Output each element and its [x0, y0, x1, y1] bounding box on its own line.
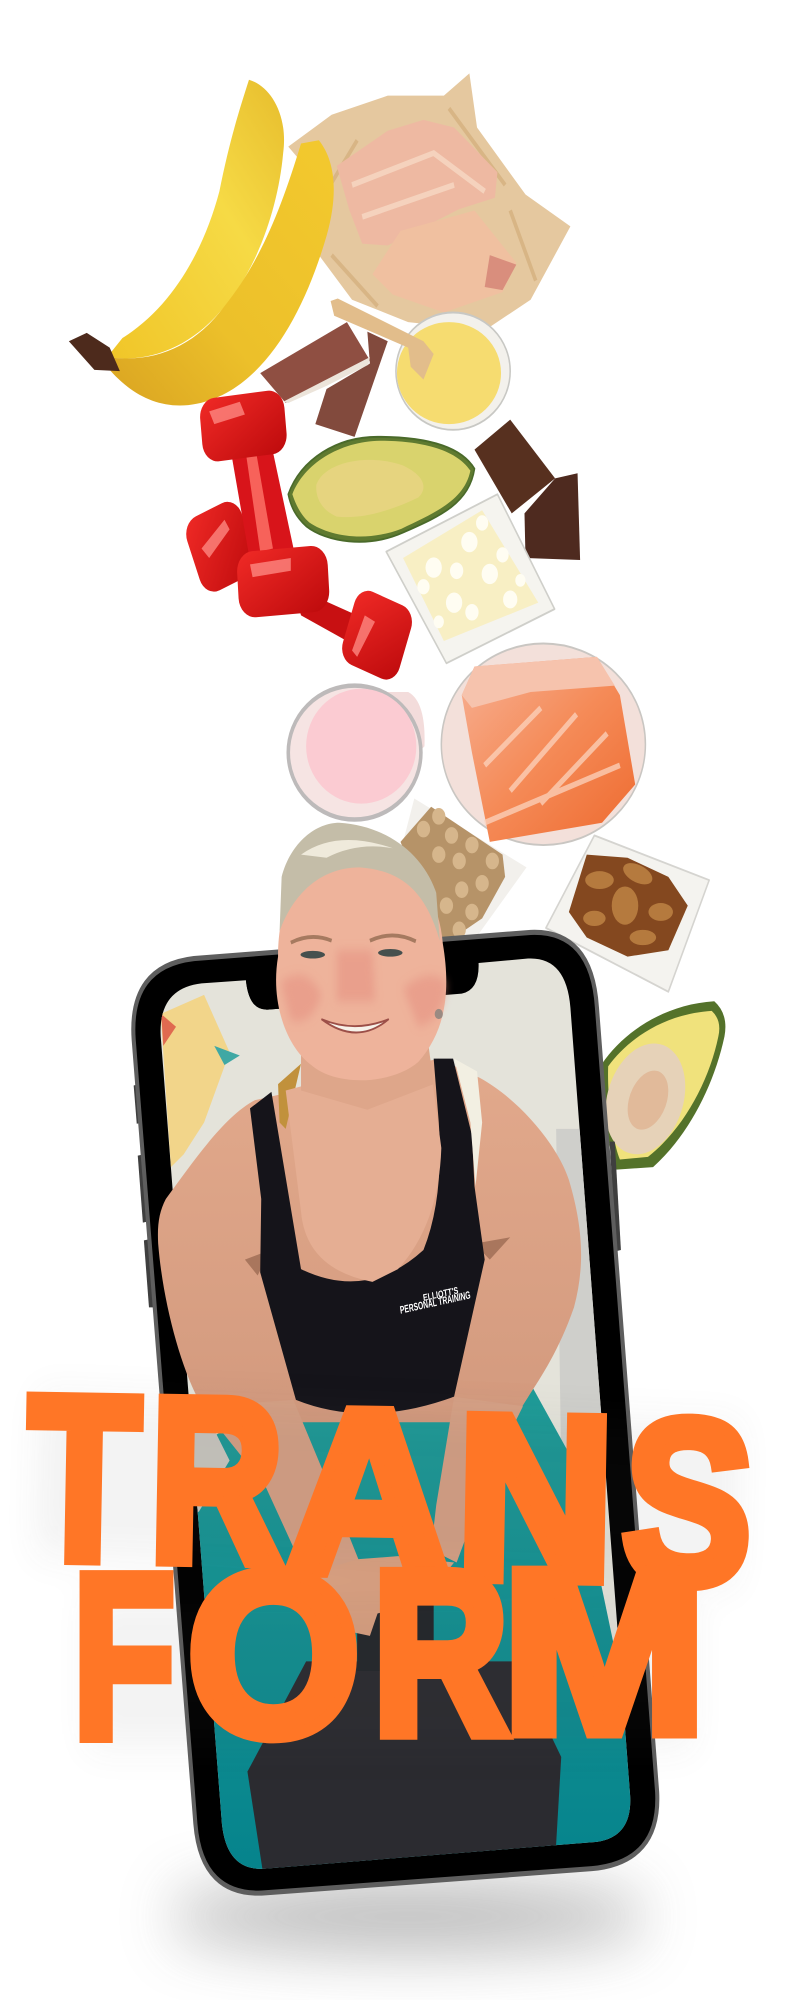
phone body	[133, 932, 657, 1893]
earring	[435, 1009, 443, 1019]
title shadow	[34, 1394, 742, 1747]
photo subject body	[158, 1052, 581, 1636]
hair	[280, 823, 440, 941]
notch edge	[246, 976, 286, 1010]
front banana	[69, 140, 334, 405]
chocolate pieces	[474, 420, 580, 560]
word: FORM: M	[502, 1522, 707, 1782]
hands	[316, 1556, 454, 1636]
phone side buttons	[134, 1084, 621, 1307]
left wall strip beside arm	[194, 1433, 230, 1512]
neck	[301, 1046, 434, 1110]
photo subject head	[276, 823, 446, 1110]
eyebrows	[291, 935, 416, 943]
dark box	[247, 1661, 561, 1888]
word: TRANS: A	[284, 1361, 453, 1624]
photo subject body: ELLIOTT'S	[422, 1285, 459, 1303]
wall art	[161, 995, 230, 1167]
eyes	[301, 949, 403, 959]
food pile	[69, 73, 709, 992]
pink shake glass	[288, 686, 425, 820]
powder bowl with spoon	[331, 298, 510, 430]
chicken on parchment paper	[288, 73, 570, 330]
phone screen photo	[160, 958, 630, 1869]
avocado half with pit	[589, 1001, 725, 1173]
black tank top	[250, 1059, 485, 1413]
phone	[128, 925, 663, 1893]
chest	[286, 1052, 441, 1282]
word: TRANS: T	[26, 1348, 142, 1610]
white bra strap	[454, 1059, 482, 1186]
word: TRANS: N	[454, 1367, 617, 1630]
word: FORM	[73, 1522, 707, 1787]
cheeks and nose	[281, 950, 446, 1027]
phone ground shadow	[163, 1885, 653, 1948]
walnuts plate	[546, 835, 709, 992]
word: TRANS	[26, 1348, 758, 1635]
left forearm	[202, 1400, 365, 1591]
word: TRANS: S	[618, 1370, 758, 1635]
dumbbell	[182, 389, 416, 685]
smile	[321, 1019, 389, 1033]
leggings	[194, 1388, 630, 1869]
face	[276, 848, 446, 1080]
word: TRANS: R	[148, 1350, 285, 1612]
logo on tank top: PERSONAL TRAINING	[399, 1290, 472, 1317]
arms and shoulders	[158, 1059, 581, 1422]
cottage cheese plate	[386, 494, 555, 663]
avocado half top	[288, 437, 474, 542]
yellow bra strap	[278, 1064, 301, 1129]
back banana	[107, 80, 284, 359]
salmon bowl	[441, 643, 645, 845]
word: FORM: R	[372, 1524, 509, 1783]
gym wall	[160, 958, 630, 1869]
word: FORM: F	[73, 1527, 175, 1787]
chickpeas plate	[401, 798, 527, 939]
protein bars	[260, 322, 388, 437]
title: TRANS FORM	[26, 1348, 758, 1787]
right forearm	[431, 1397, 523, 1562]
word: FORM: O	[187, 1525, 360, 1785]
